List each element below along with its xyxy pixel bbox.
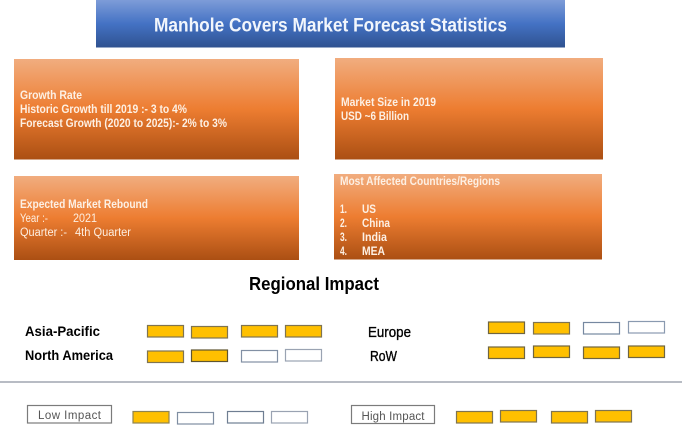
panel: growth rate: Forecast Growth (2020 to 2025):- 2% to 3% — [20, 118, 227, 130]
panel: market size: Market Size in 2019 — [341, 97, 436, 109]
panel: market size: USD ~6 Billion — [341, 111, 409, 123]
panel: expected market rebound — [14, 176, 299, 260]
divider line — [0, 381, 682, 383]
panel: most affected countries — [334, 174, 602, 260]
title: Manhole Covers Market Forecast Statistics — [154, 14, 507, 36]
panel: expected market rebound: 2021 — [73, 213, 97, 225]
panel: most affected countries: US — [362, 204, 376, 216]
impact bars: RoW — [488, 346, 664, 358]
panel: growth rate: Historic Growth till 2019 :- 3 to 4% — [20, 104, 187, 116]
panel: most affected countries: China — [362, 218, 391, 230]
panel: most affected countries: MEA — [362, 246, 385, 258]
legend: low impact: Low Impact — [38, 410, 102, 422]
panel: most affected countries: Most Affected Countries/Regions — [340, 176, 500, 188]
heading: regional impact: Regional Impact — [249, 273, 379, 294]
panel: expected market rebound: 4th Quarter — [75, 227, 131, 239]
panel: expected market rebound: Year :- — [20, 213, 48, 225]
panel: market size — [335, 58, 603, 160]
panel: expected market rebound: Expected Market Rebound — [20, 199, 148, 211]
panel: most affected countries: 4. — [340, 246, 347, 258]
panel: most affected countries: India — [362, 232, 388, 244]
panel: most affected countries: 3. — [340, 232, 347, 244]
label: RoW: RoW — [370, 349, 397, 365]
legend: low impact — [28, 406, 308, 424]
impact bars: Asia-Pacific — [148, 326, 322, 338]
panel: growth rate: Growth Rate — [20, 90, 82, 102]
panel: growth rate — [14, 59, 299, 160]
panel: most affected countries: 2. — [340, 218, 347, 230]
title — [96, 0, 565, 48]
label: North America: North America — [25, 347, 113, 363]
label: Asia-Pacific: Asia-Pacific — [25, 323, 100, 339]
impact bars: Europe — [488, 322, 664, 334]
panel: expected market rebound: Quarter :- — [20, 227, 67, 239]
label: Europe: Europe — [368, 325, 411, 341]
panel: most affected countries: 1. — [340, 204, 347, 216]
legend: high impact: High Impact — [362, 411, 425, 423]
legend: high impact — [352, 406, 632, 424]
impact bars: North America — [148, 350, 322, 362]
